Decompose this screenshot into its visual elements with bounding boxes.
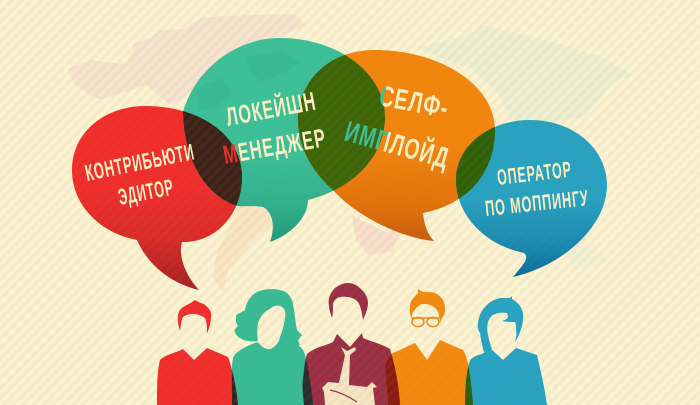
speech bubble: orange — [298, 50, 495, 241]
overlap: red and teal — [183, 111, 242, 206]
speech bubble: blue — [456, 120, 607, 277]
overlap shade: maroon and orange people — [385, 354, 400, 405]
map: North America — [67, 14, 306, 105]
bubble text: contributing editor: КОНТРИБЬЮТИ — [83, 138, 197, 186]
hair — [235, 289, 302, 352]
bubble text: self-employed: ИМПЛОЙД — [341, 114, 453, 175]
glasses — [411, 317, 440, 327]
bubble text: location manager: МЕНЕДЖЕР — [221, 122, 328, 170]
tie and crossed arms — [322, 347, 377, 405]
forearm line — [330, 390, 357, 402]
bubble text: mapping operator: ОПЕРАТОР — [496, 157, 573, 190]
map: South America — [213, 205, 272, 293]
map: Africa — [352, 215, 404, 255]
hair — [410, 289, 445, 323]
person: blue — [465, 296, 547, 405]
bubble text: location manager — [221, 86, 328, 170]
speech bubble: red — [72, 106, 242, 290]
map: Australia — [566, 245, 612, 270]
bubble text: mapping operator: ПО МОППИНГУ — [484, 185, 590, 221]
person: orange with glasses — [385, 289, 473, 405]
person: red — [157, 300, 238, 405]
overlap shade: orange and blue people — [465, 366, 473, 405]
world map — [67, 14, 632, 293]
bubble text: mapping operator — [484, 157, 590, 221]
map detail inside teal bubble — [196, 50, 300, 110]
face — [257, 306, 285, 349]
bubble text: location manager: ЛОКЕЙШН — [224, 86, 319, 132]
person: teal — [232, 289, 313, 405]
bubble text: contributing editor — [83, 138, 197, 210]
map: Eurasia — [417, 25, 632, 128]
hair and hood — [478, 296, 523, 352]
person: maroon with crossed arms — [303, 283, 400, 405]
speech bubble: teal — [183, 38, 385, 242]
overlap: teal and orange — [298, 54, 385, 191]
overlap: orange and blue — [456, 126, 495, 199]
bubble text: self-employed: СЕЛФ- — [377, 80, 451, 125]
hair — [329, 283, 368, 320]
bubble text: self-employed — [341, 80, 453, 175]
bubble text: contributing editor: ЭДИТОР — [116, 174, 176, 210]
overlap shade: teal and maroon people — [302, 358, 313, 405]
overlap shade: red and teal people — [232, 368, 238, 405]
